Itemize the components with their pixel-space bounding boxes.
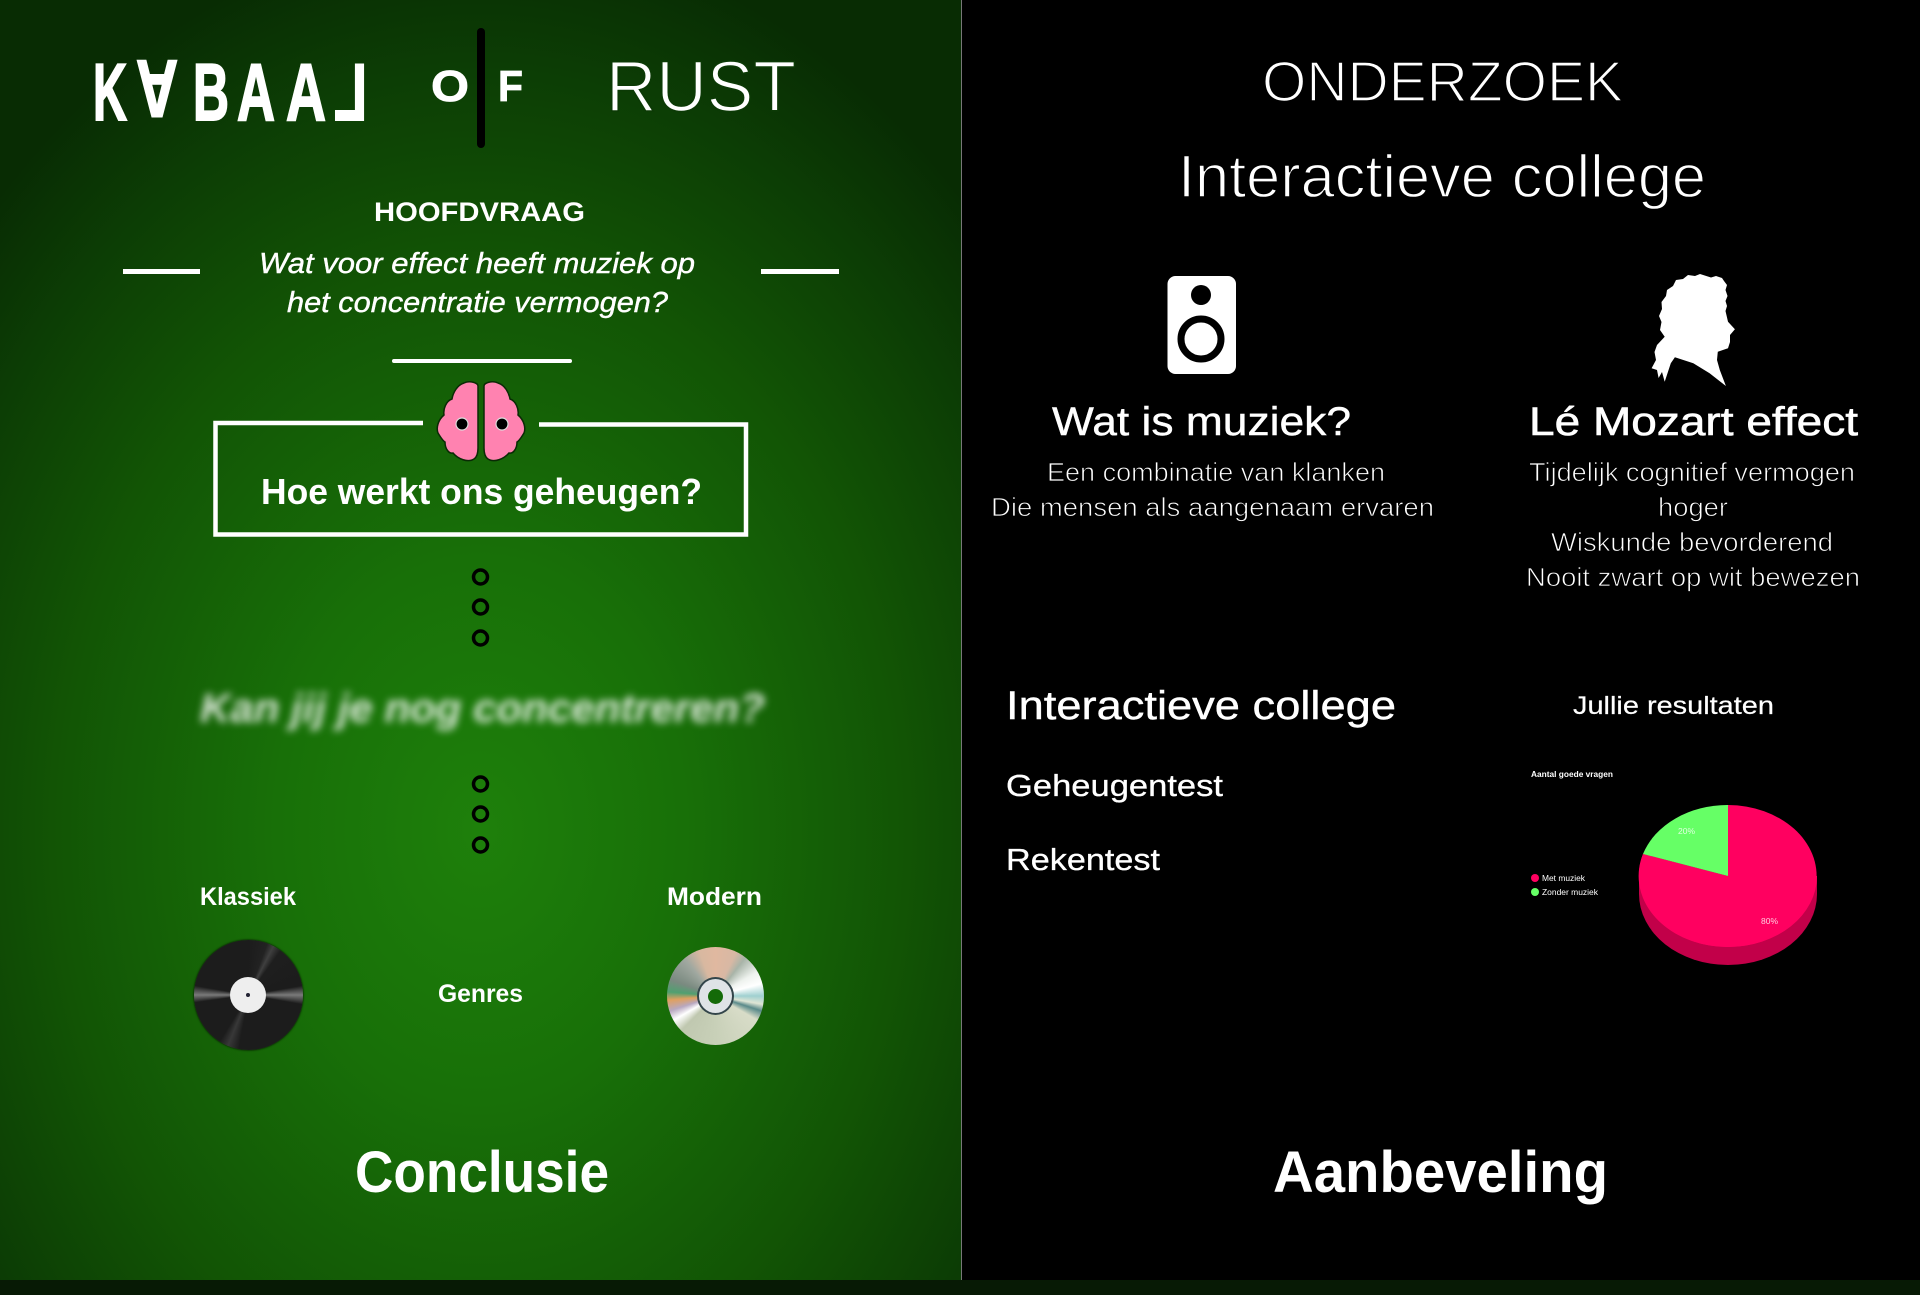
chart: pie chart [1531, 769, 1817, 965]
blurred question: Kan jij je nog concentreren? [200, 685, 765, 731]
title word: Kabaal: L [334, 48, 367, 138]
main question: Wat voor effect heeft muziek op [259, 248, 695, 280]
main question: het concentratie vermogen? [287, 287, 669, 319]
panel: memory box [216, 382, 746, 534]
heading: Jullie resultaten: Jullie resultaten [1573, 692, 1774, 720]
box heading: Hoe werkt ons geheugen? [261, 471, 702, 512]
heading: Hoofdvraag: HOOFDVRAAG [374, 197, 585, 227]
heading: Onderzoek: ONDERZOEK [1262, 50, 1623, 114]
body text: Een combinatie van klanken [1047, 457, 1385, 487]
title word: Kabaal: K [93, 48, 127, 138]
body text [991, 457, 1434, 522]
title word: Kabaal: A [237, 48, 275, 138]
item: Rekentest: Rekentest [1006, 842, 1160, 877]
panel: what is music [991, 400, 1434, 522]
title word: of: O [431, 62, 469, 111]
heading: Wat is muziek: Wat is muziek? [1052, 400, 1351, 444]
title word: Kabaal: A [286, 48, 326, 138]
label: Genres: Genres [438, 980, 523, 1008]
chart legend [1531, 874, 1599, 897]
pie labels: 20% [1678, 827, 1695, 836]
main question [259, 248, 695, 319]
body text: hoger [1658, 492, 1728, 522]
body text [1526, 457, 1860, 592]
pie slice: 80% [1639, 805, 1817, 947]
title divider bar [477, 28, 485, 148]
title word: Rust: RUST [606, 48, 796, 127]
panel: Mozart effect [1526, 400, 1860, 592]
body text: Nooit zwart op wit bewezen [1526, 562, 1860, 592]
title word: Kabaal: A [136, 43, 178, 133]
question decoration lines [123, 269, 839, 363]
body text: Wiskunde bevorderend [1551, 527, 1833, 557]
pie labels: 80% [1761, 917, 1778, 926]
title word: Kabaal [93, 43, 367, 138]
bottom band [0, 1280, 1920, 1295]
title word: Kabaal: B [193, 48, 229, 138]
subheading: Interactieve college: Interactieve college [1178, 143, 1706, 210]
icon: speaker [1168, 276, 1236, 374]
pie slice: 20% [1643, 805, 1728, 876]
item: Geheugentest: Geheugentest [1006, 768, 1223, 803]
body text: Tijdelijk cognitief vermogen [1529, 457, 1855, 487]
panel: left green background [0, 0, 961, 1280]
heading: Interactieve college [1006, 684, 1396, 728]
icon: vinyl record [194, 940, 303, 1050]
title word: of [431, 62, 523, 111]
chart legend: Met muziek [1542, 874, 1586, 883]
title word: of: F [498, 62, 523, 111]
panel: interactive lecture [1006, 684, 1396, 877]
chart legend: Zonder muziek [1542, 888, 1599, 897]
connector dots top [474, 570, 488, 645]
connector dots bottom [474, 777, 488, 852]
icon: brain [437, 382, 525, 461]
heading: Le Mozart effect: Lé Mozart effect [1529, 400, 1858, 444]
panel divider [961, 0, 962, 1280]
icon: compact disc [667, 947, 764, 1045]
icon: Mozart silhouette [1652, 274, 1735, 386]
chart title: Aantal goede vragen [1531, 769, 1613, 779]
body text: Die mensen als aangenaam ervaren [991, 492, 1434, 522]
title: Kabaal of Rust [93, 28, 796, 148]
pie labels [1678, 827, 1778, 926]
pie side [1639, 876, 1817, 965]
label: Klassiek: Klassiek [200, 883, 296, 911]
heading: Aanbeveling: Aanbeveling [1273, 1140, 1608, 1205]
heading: Conclusie: Conclusie [355, 1140, 609, 1205]
label: Modern: Modern [667, 883, 762, 911]
